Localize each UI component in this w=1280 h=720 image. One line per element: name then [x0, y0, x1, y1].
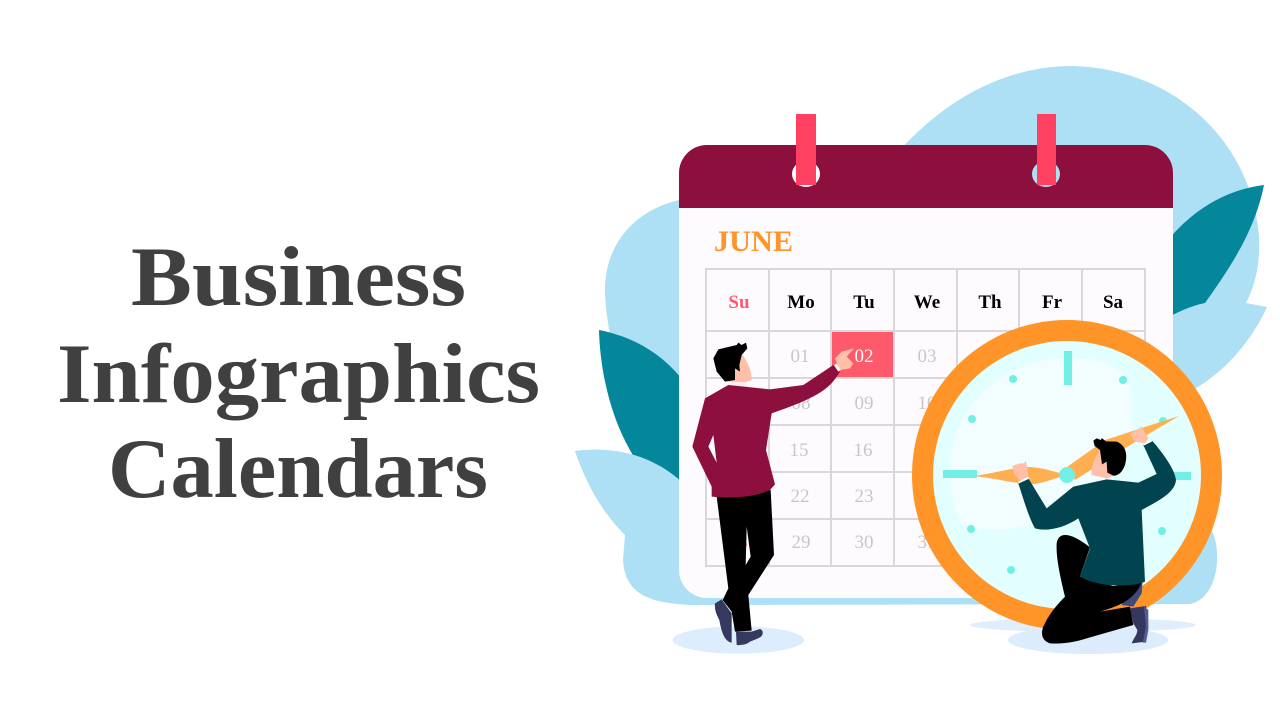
clock rim [912, 320, 1222, 630]
person: kneeling man moving the hands [1012, 427, 1176, 643]
weekday headers: Th [978, 292, 1002, 313]
back leg [1122, 580, 1143, 607]
month label: JUNE [714, 225, 793, 258]
background foliage [575, 66, 1267, 605]
collar [728, 382, 750, 387]
clock face highlight [950, 358, 1132, 530]
title [57, 230, 540, 516]
date numbers: 03 [918, 346, 936, 367]
weekday headers: Fr [1042, 292, 1063, 313]
blob: upper right [900, 66, 1267, 400]
weekday headers: Sa [1103, 292, 1124, 313]
calendar header band [679, 145, 1173, 208]
jacket [692, 365, 840, 498]
weekday headers: Su [728, 292, 750, 313]
ground shadow [673, 626, 804, 654]
binding ring right [1037, 114, 1056, 185]
title: Calendars [108, 422, 488, 516]
weekday headers: We [914, 292, 940, 313]
weekday headers: Mo [787, 292, 815, 313]
binding hole right [1032, 161, 1060, 187]
blob: left and bottom [575, 198, 1217, 605]
date numbers: 01 [790, 346, 810, 367]
shoe highlight [1143, 606, 1148, 643]
calendar [679, 114, 1173, 598]
date numbers: 02 [854, 346, 874, 367]
minute dots [967, 375, 1167, 574]
date numbers: 28 [728, 532, 748, 553]
hands [1012, 427, 1148, 481]
title: Business [131, 230, 466, 324]
shoes [715, 599, 763, 645]
clock [912, 320, 1222, 630]
weekday headers [728, 292, 1124, 313]
date numbers: 09 [854, 393, 874, 414]
date numbers: 30 [854, 532, 874, 553]
clock hands [974, 416, 1179, 484]
clock front shadow [1008, 626, 1168, 654]
hand [835, 348, 854, 370]
date numbers: 15 [790, 440, 808, 461]
hair [1093, 438, 1126, 476]
clock centre pin [1059, 467, 1075, 483]
calendar page [679, 145, 1173, 598]
cuff [834, 363, 841, 372]
date numbers: 29 [792, 532, 810, 553]
head [1092, 450, 1117, 478]
date numbers: 23 [854, 486, 874, 507]
date numbers: 10 [918, 393, 936, 414]
date numbers: 31 [918, 532, 936, 553]
head [728, 353, 752, 382]
binding hole left [792, 161, 820, 187]
hour ticks [943, 351, 1191, 480]
cuffs [1018, 440, 1152, 483]
binding ring left [796, 114, 816, 185]
date numbers: 22 [790, 486, 810, 507]
highlighted date cell [832, 332, 894, 378]
date numbers [728, 346, 936, 553]
hair [713, 343, 747, 382]
clock face [933, 341, 1201, 609]
jacket [1018, 441, 1176, 585]
leaf: left teal [599, 330, 690, 495]
shoe [1130, 606, 1148, 643]
date numbers: 08 [792, 393, 810, 414]
clock shadow [970, 618, 1196, 632]
weekday headers: Tu [853, 292, 875, 313]
date numbers: 16 [854, 440, 872, 461]
person: standing man pointing [673, 343, 854, 654]
trousers [1042, 535, 1142, 643]
title: Infographics [57, 327, 540, 421]
trousers [717, 490, 774, 632]
calendar grid [706, 269, 1145, 566]
leaf: left light blue [575, 450, 690, 560]
leaf: right teal [1160, 185, 1264, 322]
